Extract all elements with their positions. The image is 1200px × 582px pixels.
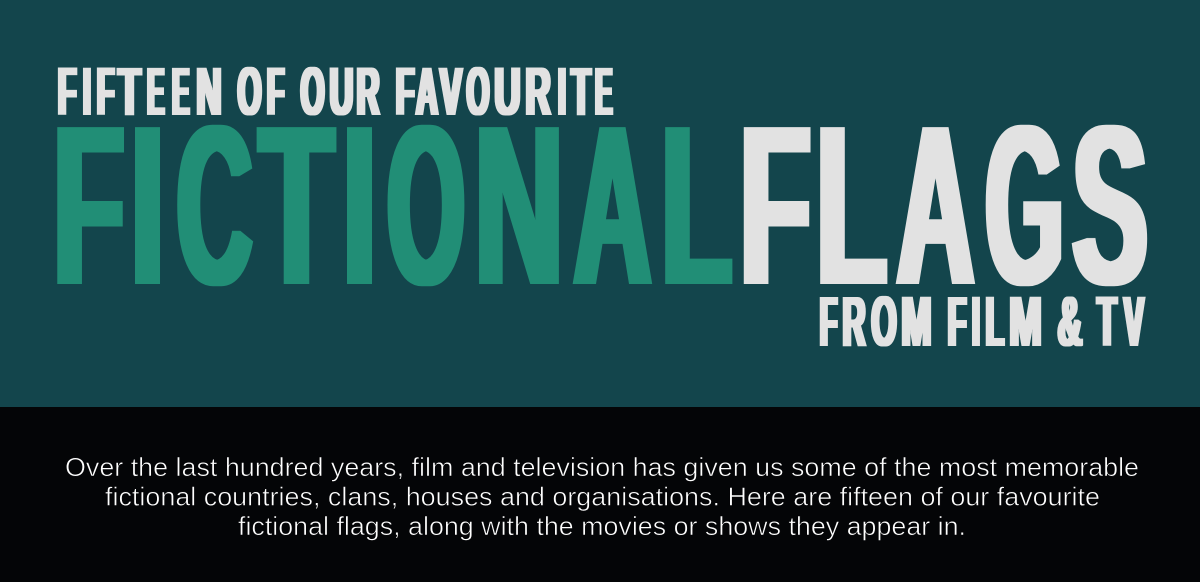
title line: from film and tv: F [820,283,837,362]
title line: fifteen of our favourite: R [357,53,380,130]
title line: from film and tv: & [1058,282,1082,361]
title line: fifteen of our favourite: U [494,52,521,130]
title line: fifteen of our favourite: R [525,52,551,130]
title line: fifteen of our favourite: O [467,54,489,131]
title line: from film and tv: I [972,283,980,362]
title line: fifteen of our favourite: I [558,53,566,131]
title line: from film and tv: F [948,282,966,362]
title word: fictional: F [54,78,124,333]
title line: fifteen of our favourite: E [595,54,612,131]
title word: fictional: T [259,77,334,333]
header panel [0,0,1200,407]
intro text: Over the last hundred years, film and television has given us some of the most memorable [65,452,1139,482]
title line: from film and tv: L [986,282,1004,362]
title word: fictional: L [661,78,732,333]
title word: fictional: O [387,79,465,333]
title line: fifteen of our favourite: F [58,54,76,131]
title line: from film and tv: M [901,282,932,361]
title line: fifteen of our favourite: A [416,54,438,131]
title line: fifteen of our favourite: F [267,54,284,131]
title line: fifteen of our favourite [58,52,612,131]
title word: fictional: I [131,79,164,333]
title word: fictional [54,77,732,333]
title line: fifteen of our favourite: T [118,53,141,130]
title word: flags: S [1072,79,1148,333]
title line: fifteen of our favourite: O [301,54,324,131]
title line: from film and tv [820,281,1144,362]
title word: fictional: C [177,78,252,333]
title line: fifteen of our favourite: E [147,54,164,131]
title line: fifteen of our favourite: F [396,54,414,131]
title word: fictional: A [574,78,651,333]
title line: fifteen of our favourite: T [571,53,591,130]
title word: fictional: N [475,77,563,333]
title word: fictional: I [343,79,376,333]
title line: from film and tv: T [1097,281,1117,361]
title line: from film and tv: R [843,281,866,361]
title line: fifteen of our favourite: N [196,52,222,130]
intro panel [0,407,1200,582]
title word: flags: A [897,78,974,333]
title word: flags: G [986,79,1063,333]
title line: from film and tv: O [871,282,897,361]
title line: fifteen of our favourite: E [172,54,189,131]
title word: flags [740,78,1148,333]
intro text: fictional flags, along with the movies or shows they appear in. [238,511,966,541]
title line: fifteen of our favourite: U [330,54,353,130]
intro text: fictional countries, clans, houses and organisations. Here are fifteen of our favourite [105,482,1100,512]
title line: fifteen of our favourite: F [97,54,114,131]
title line: fifteen of our favourite: O [238,54,261,131]
title line: from film and tv: V [1124,282,1144,362]
title line: fifteen of our favourite: V [440,54,462,130]
intro text [65,452,1139,541]
title line: fifteen of our favourite: I [83,53,91,131]
title word: flags: L [816,78,887,333]
title line: from film and tv: M [1009,283,1042,362]
title word: flags: F [740,78,811,333]
